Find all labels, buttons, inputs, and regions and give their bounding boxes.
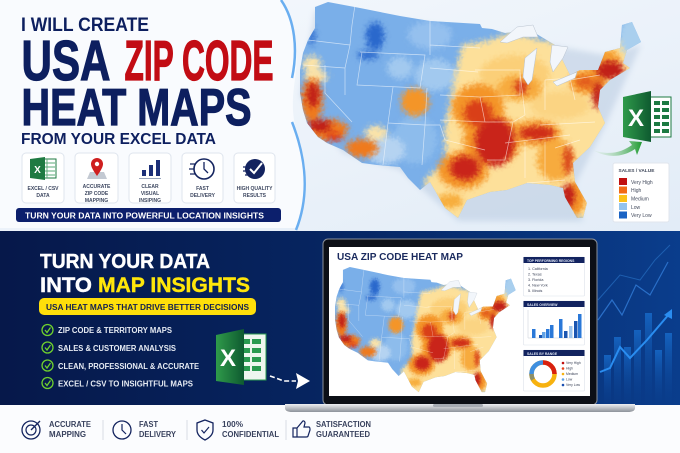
yellow pill tagline: USA HEAT MAPS THAT DRIVE BETTER DECISIONS	[46, 302, 249, 312]
background chart graphics	[598, 245, 672, 405]
white left panel with blue curved edge	[0, 0, 305, 230]
banner: turn your data	[16, 208, 281, 222]
card: high quality results	[234, 153, 275, 203]
card: accurate zip code mapping: MAPPING	[85, 198, 108, 204]
card: fast delivery: FAST	[196, 186, 209, 192]
card: excel csv data: EXCEL / CSV	[27, 186, 59, 192]
bottom trust strip	[0, 405, 680, 453]
card: excel csv data	[22, 153, 64, 203]
badge: fast delivery: DELIVERY	[139, 430, 177, 439]
panel: top performing regions: TOP PERFORMING REGIONS	[527, 259, 575, 263]
heading: USA ZIP CODE	[22, 29, 274, 93]
heading: HEAT MAPS: HEAT MAPS	[22, 79, 252, 137]
excel icon lower: X	[220, 345, 236, 372]
panel: sales by range donut chart: Medium	[566, 372, 578, 376]
panel: sales by range donut chart: Very High	[566, 361, 581, 365]
yellow pill tagline	[39, 298, 256, 315]
heading: USA ZIP CODE: ZIP CODE	[124, 29, 274, 93]
checklist: CLEAN, PROFESSIONAL & ACCURATE	[58, 362, 200, 371]
banner: turn your data: TURN YOUR DATA INTO POWERFUL LOCATION INSIGHTS	[25, 210, 264, 220]
badge: accurate mapping: MAPPING	[49, 430, 86, 439]
panel: sales by range donut chart: High	[566, 367, 573, 371]
legend: sales value: Very High	[631, 180, 653, 186]
panel: top performing regions	[524, 257, 584, 296]
panel: sales overview bar chart	[524, 301, 584, 345]
excel icon with arrow: X	[628, 105, 644, 132]
top panel background	[0, 0, 680, 231]
badge: confidential: 100%	[222, 420, 243, 429]
checklist: ZIP CODE & TERRITORY MAPS	[58, 326, 173, 335]
heading: I will create: I WILL CREATE	[21, 15, 149, 36]
legend: sales value: High	[631, 188, 642, 194]
subheading: FROM YOUR EXCEL DATA	[21, 131, 216, 148]
card: accurate zip code mapping: ACCURATE	[83, 184, 111, 190]
card: fast delivery	[182, 153, 223, 203]
card: excel csv data: X	[34, 165, 41, 176]
checklist: SALES & CUSTOMER ANALYSIS	[58, 344, 177, 353]
legend: sales value: Low	[631, 205, 641, 211]
card: accurate zip code mapping: ZIP CODE	[85, 191, 109, 197]
card: fast delivery: DELIVERY	[190, 193, 216, 199]
badge: fast delivery	[113, 420, 177, 439]
badge: accurate mapping: ACCURATE	[49, 420, 91, 429]
laptop	[285, 239, 635, 412]
panel: sales by range donut chart: Low	[566, 378, 573, 382]
panel: sales overview bar chart: SALES OVERVIEW	[527, 303, 558, 307]
badge: fast delivery: FAST	[139, 420, 158, 429]
heading: turn your data: TURN YOUR DATA	[40, 251, 210, 273]
badge: confidential: CONFIDENTIAL	[222, 430, 279, 439]
badge: satisfaction guaranteed: SATISFACTION	[316, 420, 371, 429]
panel: sales by range donut chart: Very Low	[566, 383, 580, 387]
card: high quality results: RESULTS	[243, 193, 267, 199]
panel: sales by range donut chart	[524, 350, 584, 391]
panel: top performing regions: 1. California	[528, 267, 549, 271]
map shadow	[300, 10, 641, 221]
badge: accurate mapping	[22, 420, 91, 439]
panel: top performing regions: 2. Texas	[528, 272, 542, 276]
badge: satisfaction guaranteed	[293, 420, 371, 439]
heading: into map insights: INTO	[40, 274, 92, 297]
legend: sales value: SALES / VALUE	[618, 168, 655, 174]
card: clear visual insights	[129, 153, 171, 204]
excel icon with arrow	[593, 91, 671, 156]
badge: confidential	[197, 420, 279, 440]
legend: sales value	[613, 163, 669, 222]
card: clear visual insights: INSIPING	[139, 198, 161, 204]
panel: top performing regions: 3. Florida	[528, 278, 544, 282]
legend: sales value: Very Low	[631, 213, 652, 219]
heading: USA ZIP CODE: USA	[22, 29, 110, 93]
laptop title: USA ZIP CODE HEAT MAP	[337, 252, 463, 263]
card: accurate zip code mapping	[75, 153, 118, 204]
legend: sales value: Medium	[631, 196, 649, 202]
usa heat map	[295, 0, 650, 230]
panel: top performing regions: 5. Illinois	[528, 289, 543, 293]
panel: sales by range donut chart: SALES BY RANGE	[527, 352, 558, 356]
checklist: EXCEL / CSV TO INSIGHTFUL MAPS	[58, 380, 194, 388]
dashed arrow	[270, 373, 310, 389]
badge: satisfaction guaranteed: GUARANTEED	[316, 430, 370, 439]
laptop heat map	[332, 266, 520, 399]
excel icon lower	[216, 329, 266, 385]
checklist	[42, 324, 200, 388]
card: high quality results: HIGH QUALITY	[237, 186, 273, 192]
card: excel csv data: DATA	[36, 193, 50, 199]
lower dark panel	[0, 231, 680, 405]
card: clear visual insights: VISUAL	[141, 191, 159, 197]
panel: top performing regions: 4. New York	[528, 284, 548, 288]
card: clear visual insights: CLEAR	[141, 184, 159, 190]
heading: into map insights: MAP INSIGHTS	[98, 274, 250, 297]
